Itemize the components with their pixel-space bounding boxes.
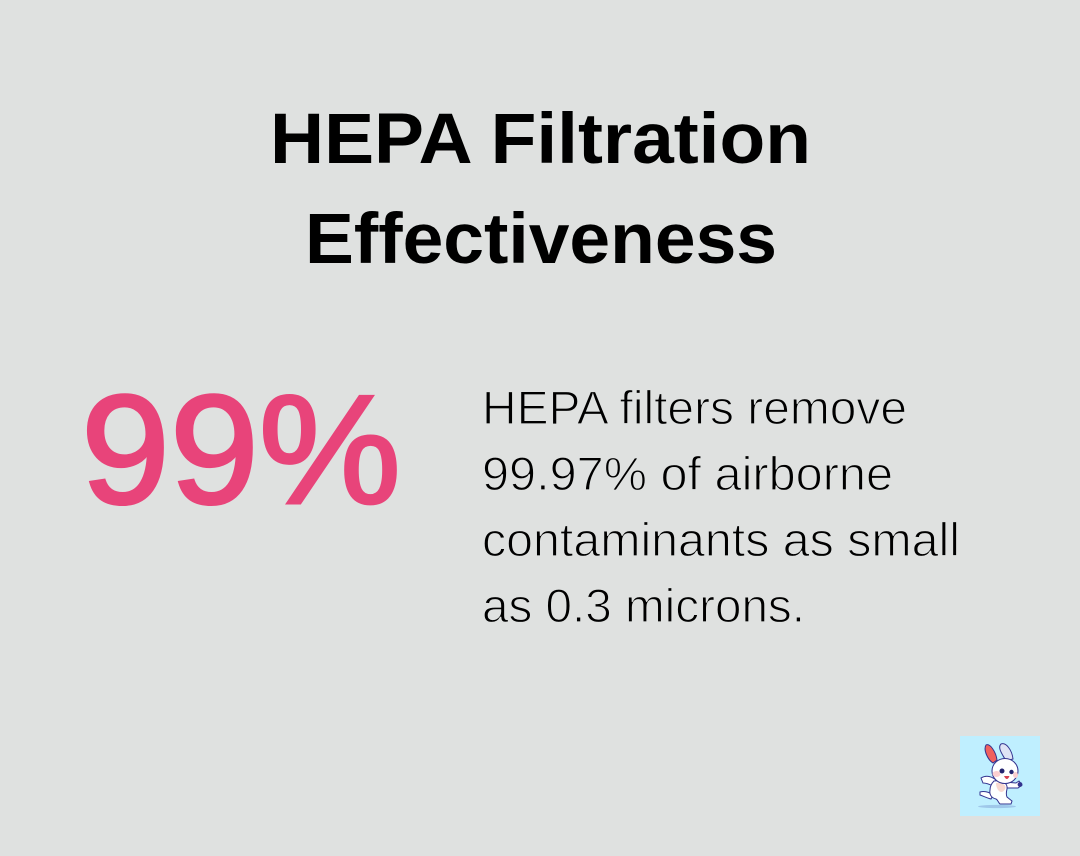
title [270,100,811,279]
title: HEPA Filtration [270,100,811,179]
description text: contaminants as small [482,513,960,566]
big statistic: 99%: 99% [81,363,401,536]
description text: 99.97% of airborne [482,447,893,500]
title: Effectiveness [305,200,777,279]
icon: running bunny logo [960,736,1040,816]
description text: as 0.3 microns. [482,579,805,632]
description text: HEPA filters remove [482,381,907,434]
description text [482,381,960,632]
